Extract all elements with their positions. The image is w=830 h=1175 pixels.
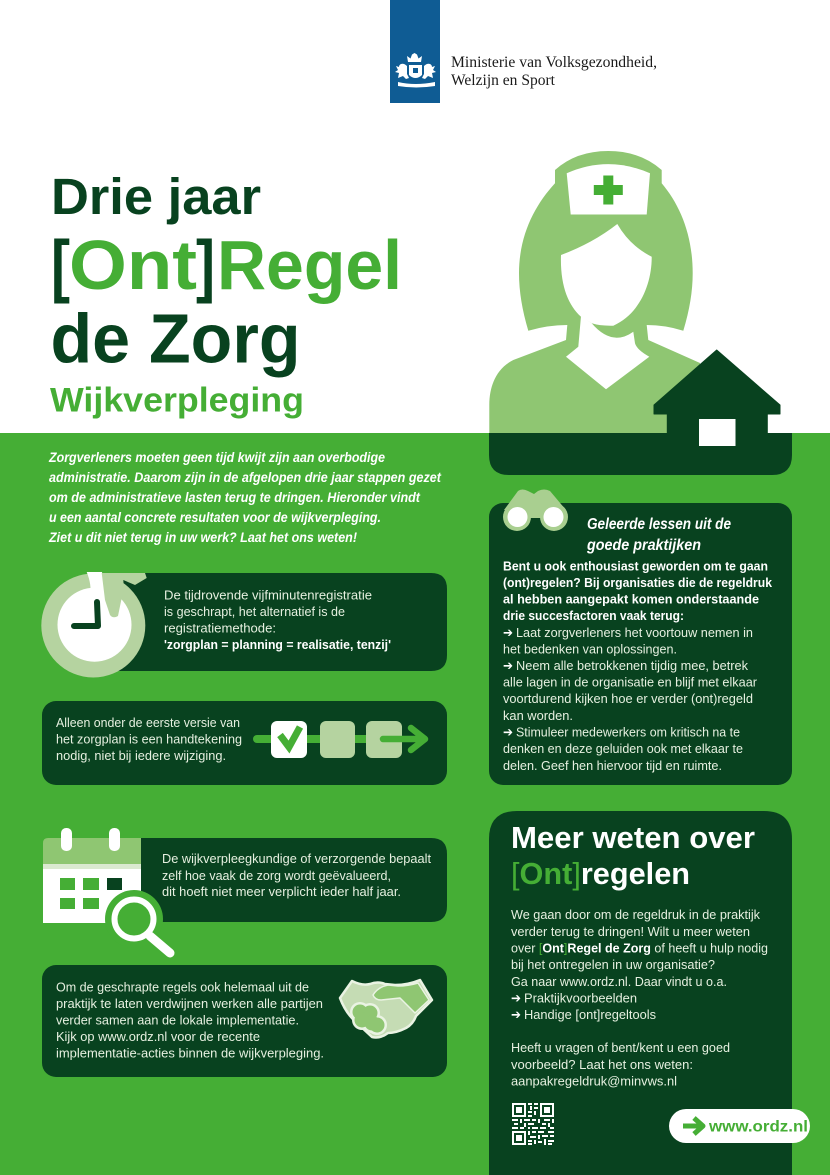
nurse illustration with house: [489, 151, 792, 475]
success factors: alle lagen in de organisatie en blijf met elkaar: [503, 674, 758, 690]
ministry name: Welzijn en Sport: [451, 72, 556, 89]
card: implementatie: [42, 965, 447, 1077]
card text: 'zorgplan = planning = realisatie, tenzij': [164, 637, 391, 652]
title: [50, 168, 402, 420]
card text: praktijk te laten verdwijnen werken alle partijen: [56, 996, 323, 1011]
heading: Geleerde lessen uit de: [587, 516, 731, 533]
card text: is geschrapt, het alternatief is de: [164, 604, 345, 619]
card: handtekening: [42, 701, 447, 785]
card text: De tijdrovende vijfminutenregistratie: [164, 588, 372, 602]
card text: dit hoeft niet meer verplicht ieder half jaar.: [162, 884, 401, 899]
card text: nodig, niet bij iedere wijziging.: [56, 748, 226, 763]
success factors: ➔: [503, 658, 513, 673]
bold intro: [503, 558, 773, 623]
card text: Kijk op www.ordz.nl voor de recente: [56, 1029, 260, 1044]
title: de Zorg: [50, 300, 300, 378]
bold intro: al hebben aangepakt komen onderstaande: [503, 592, 759, 606]
body text: bij het ontregelen in uw organisatie?: [511, 957, 715, 972]
icon: handshake: [340, 980, 432, 1038]
heading: [511, 820, 755, 891]
bold intro: Bent u ook enthousiast geworden om te gaan: [503, 558, 768, 574]
success factors: het bedenken van oplossingen.: [503, 642, 677, 656]
card text: implementatie-acties binnen de wijkverpleging.: [56, 1046, 324, 1060]
success factors: delen. Geef hen hiervoor tijd en ruimte.: [503, 758, 722, 773]
title: Regel: [217, 226, 402, 304]
success factors: voortdurend kijken hoe er verder (ont)regeld: [503, 691, 753, 706]
success factors: ➔: [503, 625, 513, 640]
success factors: Stimuleer medewerkers om kritisch na te: [516, 724, 740, 740]
heading: Meer weten over: [511, 820, 755, 855]
title: Drie jaar: [51, 168, 261, 225]
nurse silhouette: [489, 151, 700, 434]
body text: voorbeeld? Laat het ons weten:: [511, 1057, 693, 1072]
card text: [162, 851, 431, 899]
body text: ➔: [511, 1007, 521, 1022]
card text: Alleen onder de eerste versie van: [56, 715, 240, 730]
card text: [164, 588, 391, 652]
success factors: Neem alle betrokkenen tijdig mee, betrek: [516, 658, 748, 673]
body text: [511, 907, 768, 1088]
title: ]: [196, 226, 215, 304]
success factors: denken en deze geluiden ook met elkaar te: [503, 741, 743, 756]
body text: We gaan door om de regeldruk in de praktijk: [511, 907, 760, 922]
success factors: ➔: [503, 724, 513, 740]
card: vijfminutenregistratie: [41, 572, 447, 678]
body text: Heeft u vragen of bent/kent u een goed: [511, 1040, 730, 1055]
body text: Handige [ont]regeltools: [524, 1007, 656, 1022]
intro text: Zorgverleners moeten geen tijd kwijt zijn aan overbodige: [48, 449, 385, 465]
title: Wijkverpleging: [50, 382, 304, 420]
success factors: kan worden.: [503, 708, 573, 723]
intro text: [48, 449, 442, 545]
body text: over [Ont]Regel de Zorg of heeft u hulp nodig: [511, 940, 768, 956]
card text: [56, 715, 242, 763]
panel under nurse: [489, 433, 792, 475]
nurse neck: [566, 316, 649, 389]
nurse cap: [567, 164, 650, 214]
intro text: Ziet u dit niet terug in uw werk? Laat het ons weten!: [48, 529, 357, 545]
heading: goede praktijken: [586, 537, 701, 554]
title: Ont: [69, 226, 197, 304]
button: www.ordz.nl: [669, 1109, 810, 1143]
heading: [586, 516, 731, 554]
intro text: om de administratieve lasten terug te dringen. Hieronder vindt: [49, 489, 421, 505]
panel: meer weten: [489, 811, 810, 1175]
card text: verder samen aan de lokale implementatie.: [56, 1012, 299, 1028]
bold intro: drie succesfactoren vaak terug:: [503, 608, 684, 623]
logo: Rijksoverheid: [390, 0, 440, 103]
success factors: Laat zorgverleners het voortouw nemen in: [516, 625, 753, 640]
intro text: u een aantal concrete resultaten voor de wijkverpleging.: [49, 509, 381, 525]
cap cross: [594, 176, 623, 204]
panel: geleerde lessen: [489, 490, 792, 785]
card text: het zorgplan is een handtekening: [56, 732, 242, 746]
card text: zelf hoe vaak de zorg wordt geëvalueerd,: [162, 868, 391, 883]
QR code: [512, 1103, 554, 1145]
body text: aanpakregeldruk@minvws.nl: [511, 1074, 677, 1088]
body text: Praktijkvoorbeelden: [524, 990, 637, 1006]
bold intro: (ont)regelen? Bij organisaties die de regeldruk: [503, 575, 773, 590]
card text: registratiemethode:: [164, 620, 276, 636]
icon: clock: [41, 572, 147, 678]
ministry name: [451, 54, 657, 89]
intro text: administratie. Daarom zijn in de afgelopen drie jaar stappen gezet: [49, 469, 442, 485]
body text: verder terug te dringen! Wilt u meer weten: [511, 924, 750, 939]
house window: [699, 419, 736, 446]
card text: Om de geschrapte regels ook helemaal uit de: [56, 980, 309, 994]
success factors: [503, 625, 758, 773]
body text: ➔: [511, 990, 521, 1006]
nurse face: [561, 224, 652, 326]
card: evaluatie: [43, 828, 447, 953]
icon: versions timeline with arrow: [257, 721, 425, 758]
icon: calendar with magnifier: [43, 828, 170, 953]
house: [654, 350, 780, 434]
button: www.ordz.nl: www.ordz.nl: [708, 1118, 808, 1136]
ministry name: Ministerie van Volksgezondheid,: [451, 54, 657, 71]
icon: binoculars: [503, 490, 568, 531]
body text: Ga naar www.ordz.nl. Daar vindt u o.a.: [511, 974, 727, 989]
card text: De wijkverpleegkundige of verzorgende bepaalt: [162, 851, 431, 866]
card text: [56, 980, 324, 1060]
title: [: [51, 226, 70, 304]
heading: [Ont]regelen: [511, 856, 690, 891]
